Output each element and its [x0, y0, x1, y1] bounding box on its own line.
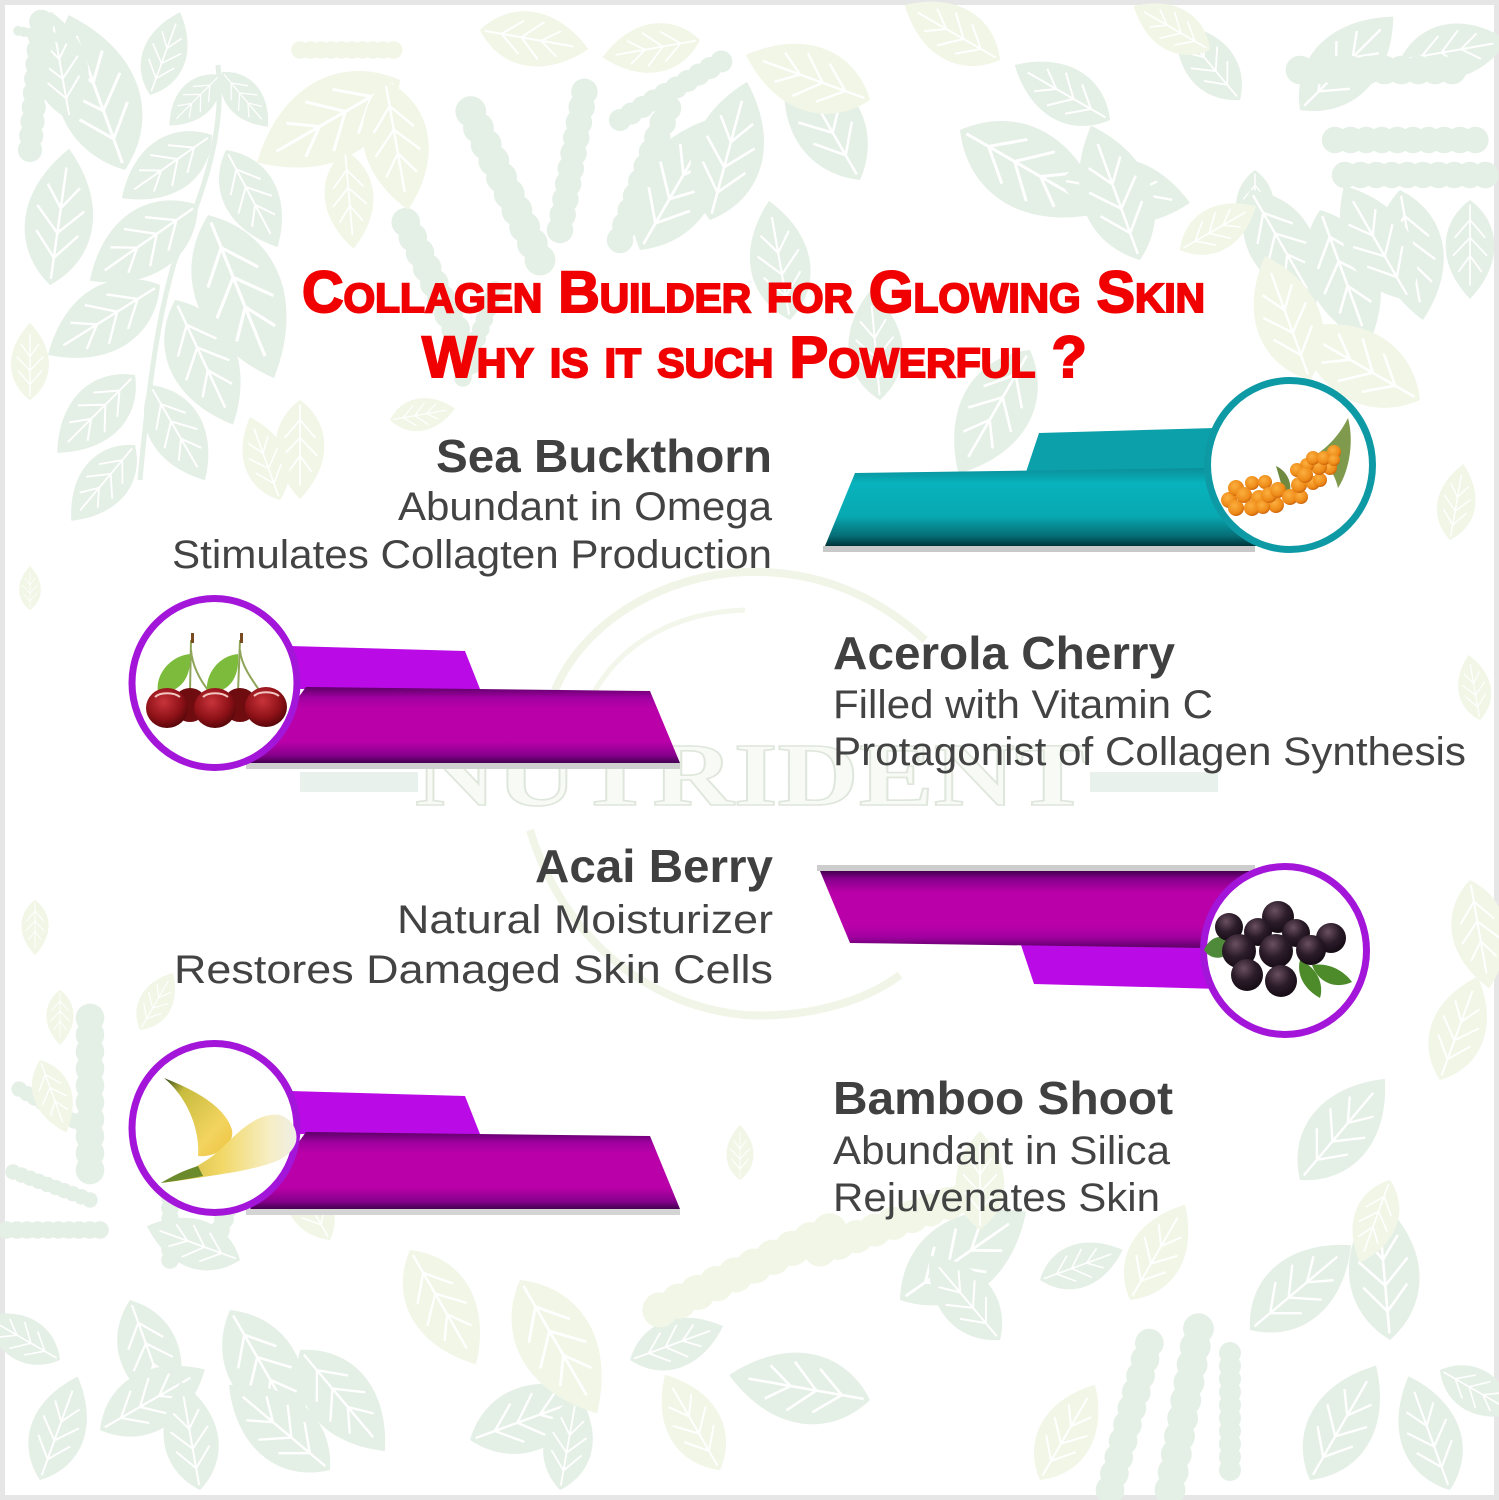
title: Collagen Builder for Glowing Skin	[302, 260, 1205, 325]
icon: sea buckthorn in ring	[1208, 380, 1372, 550]
title: Why is it such Powerful ?	[422, 325, 1087, 390]
text block: acerola cherry: Acerola Cherry	[833, 627, 1175, 679]
watermark: brand seal	[300, 572, 1218, 1015]
icon: bamboo shoot in ring	[132, 1044, 297, 1212]
purple ribbon banner	[817, 865, 1255, 989]
text block: acai berry: Restores Damaged Skin Cells	[174, 948, 773, 992]
lower left fern	[89, 1008, 91, 1170]
text block: bamboo shoot: Bamboo Shoot	[833, 1072, 1173, 1124]
text block: acerola cherry: Protagonist of Collagen Synthesis	[833, 730, 1466, 774]
text block: acerola cherry	[833, 627, 1466, 774]
title	[302, 260, 1205, 390]
teal ribbon banner	[823, 428, 1260, 552]
text block: sea buckthorn: Abundant in Omega	[398, 485, 773, 529]
panel: acerola cherry	[132, 598, 1466, 774]
text block: sea buckthorn: Stimulates Collagten Production	[172, 533, 772, 577]
text block: acerola cherry: Filled with Vitamin C	[833, 683, 1213, 727]
text block: acai berry: Natural Moisturizer	[397, 898, 773, 942]
text block: bamboo shoot: Abundant in Silica	[833, 1129, 1171, 1173]
panel: sea buckthorn	[172, 380, 1372, 577]
text block: bamboo shoot	[833, 1072, 1173, 1220]
purple ribbon banner	[246, 1091, 680, 1215]
icon: cherries in ring	[132, 598, 297, 768]
text block: acai berry: Acai Berry	[535, 840, 773, 892]
panel: bamboo shoot	[132, 1044, 1173, 1220]
icon: acai berries in ring	[1204, 866, 1366, 1034]
text block: bamboo shoot: Rejuvenates Skin	[833, 1176, 1160, 1220]
text block: acai berry	[174, 840, 773, 992]
text block: sea buckthorn	[172, 430, 773, 577]
watermark: brand seal: NUTRIDENT	[415, 726, 1090, 825]
purple ribbon banner	[246, 646, 680, 769]
text block: sea buckthorn: Sea Buckthorn	[436, 430, 772, 482]
panel: acai berry	[174, 840, 1366, 1034]
